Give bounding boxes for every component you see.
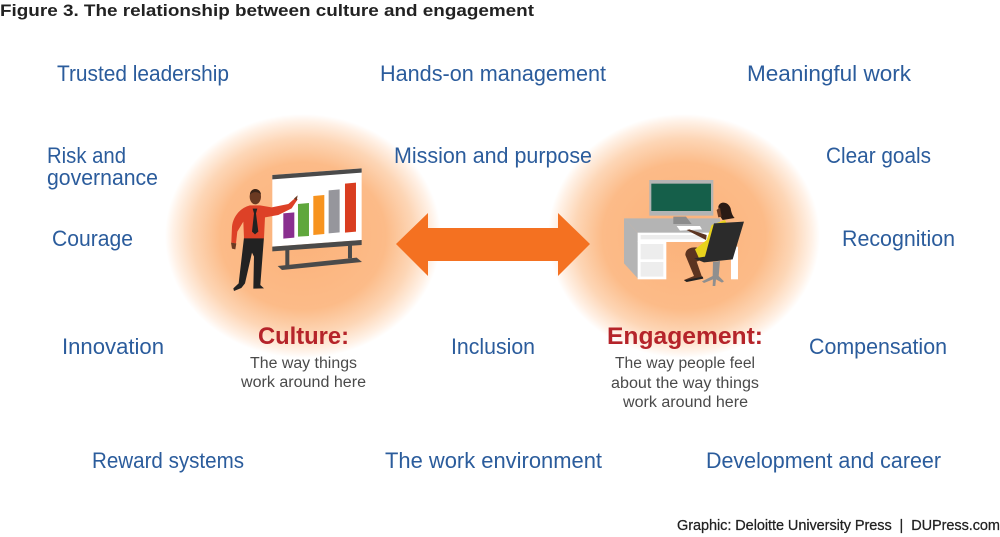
label: innovation: Innovation — [62, 334, 164, 359]
label: risk and governance — [47, 143, 158, 190]
monitor — [649, 180, 713, 216]
icon: person at desk — [624, 180, 744, 286]
credit: Graphic: Deloitte University Press | DUPress.com — [677, 518, 1000, 534]
double arrow — [396, 213, 590, 276]
culture caption: work around here — [240, 374, 366, 391]
label: risk and governance: governance — [47, 165, 158, 190]
engagement caption: work around here — [622, 394, 748, 411]
title: Figure 3. The relationship between culture and engagement — [0, 1, 534, 20]
culture caption: The way things — [250, 355, 357, 372]
engagement glow — [548, 114, 820, 358]
label: the work environment: The work environment — [385, 448, 603, 473]
icon: presenter with chart — [231, 168, 362, 291]
label: risk and governance: Risk and — [47, 143, 126, 168]
office chair — [694, 222, 744, 286]
culture glow — [165, 114, 441, 358]
label: reward systems: Reward systems — [92, 448, 244, 473]
label: mission and purpose: Mission and purpose — [394, 143, 592, 168]
label: inclusion: Inclusion — [451, 334, 535, 359]
label: recognition: Recognition — [842, 226, 955, 251]
desk — [624, 217, 738, 279]
label: development and career: Development and career — [706, 448, 941, 473]
label: compensation: Compensation — [809, 334, 947, 359]
culture caption: Culture: — [258, 323, 349, 350]
label: courage: Courage — [52, 226, 133, 251]
engagement caption: about the way things — [611, 375, 759, 392]
label: meaningful work: Meaningful work — [747, 61, 912, 86]
bar chart — [283, 183, 356, 239]
label: trusted leadership: Trusted leadership — [57, 61, 229, 86]
engagement caption — [607, 323, 763, 411]
seated woman — [684, 203, 735, 282]
label: clear goals: Clear goals — [826, 143, 931, 168]
engagement caption: Engagement: — [607, 323, 763, 350]
presenter figure — [231, 189, 298, 291]
presentation board — [272, 168, 362, 270]
engagement caption: The way people feel — [615, 355, 755, 372]
culture caption — [240, 323, 366, 391]
label: hands-on management: Hands-on management — [380, 61, 607, 86]
